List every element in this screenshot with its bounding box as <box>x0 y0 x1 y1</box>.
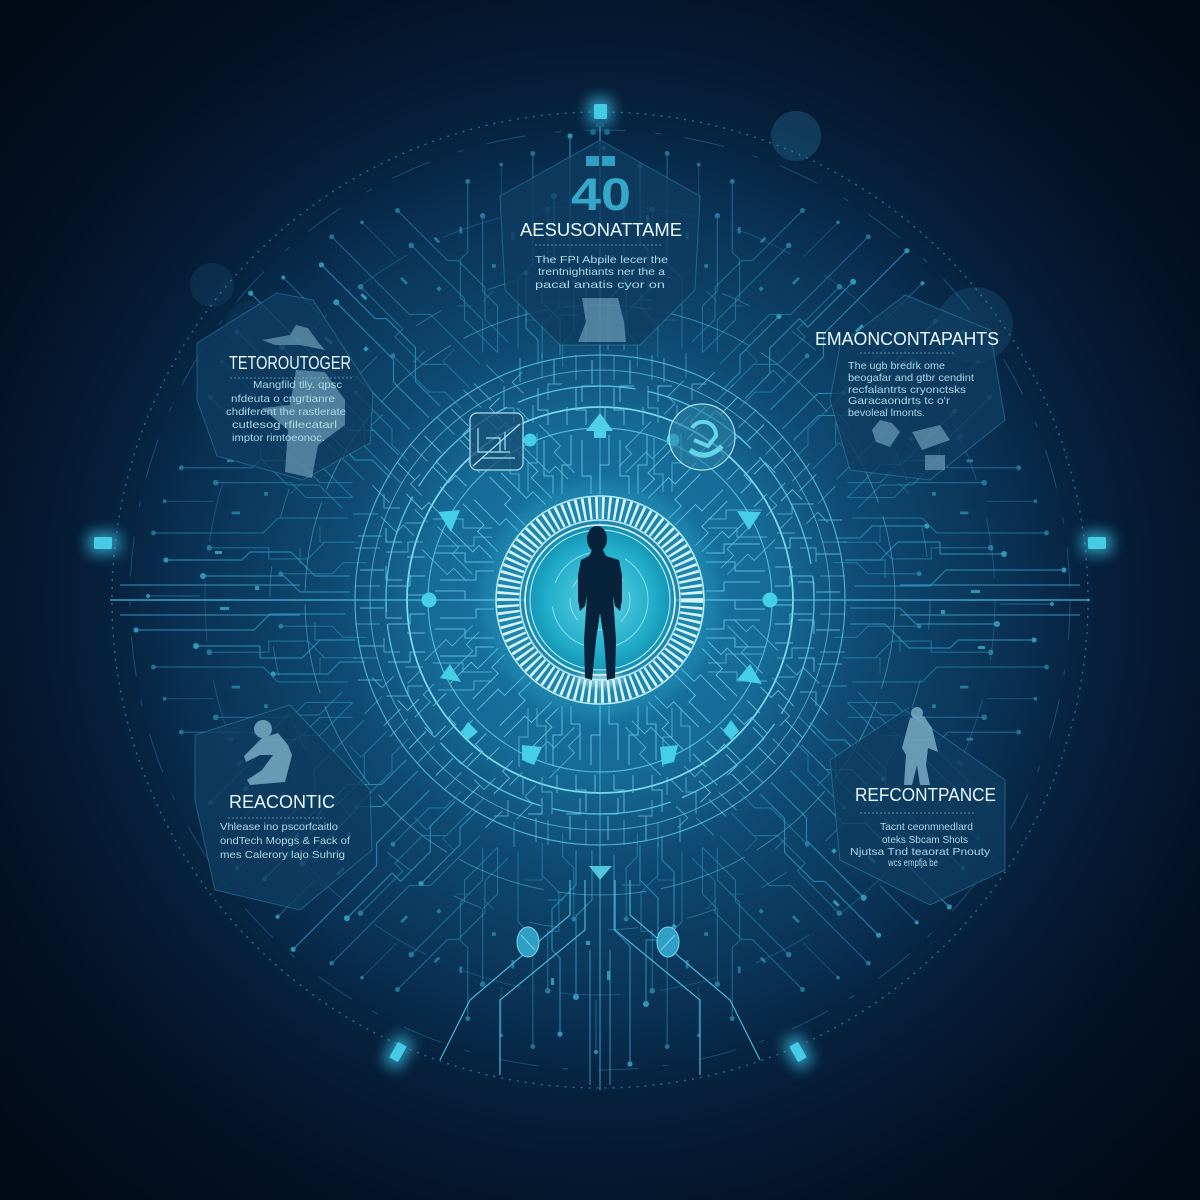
right panel body: bevoleal lmonts. <box>848 407 925 419</box>
outer circuit traces <box>133 133 1067 1067</box>
top panel body: trentnightiants ner the a <box>538 266 665 278</box>
bottom right panel body: Tacnt ceonmnedlard <box>880 821 973 833</box>
top panel body: pacal anatis cyor on <box>535 279 665 291</box>
top glowing connector <box>588 98 612 135</box>
bottom left panel body: ondTech Mopgs & Fack of <box>220 835 350 847</box>
right panel figure <box>872 420 950 470</box>
left panel heading: TETOROUTOGER <box>229 353 351 373</box>
bottom arrow <box>589 866 612 880</box>
central glowing core <box>482 482 718 718</box>
bottom right panel figure <box>902 707 938 785</box>
bottom right panel body: oteks Sbcam Shots <box>882 834 968 846</box>
bottom left panel <box>195 705 372 910</box>
top panel <box>500 140 700 345</box>
bottom right panel <box>830 707 1005 905</box>
right glowing connector <box>1082 532 1112 554</box>
left panel body <box>226 379 346 444</box>
left panel shape <box>197 293 373 480</box>
left panel body: nfdeuta o cngrtianre <box>231 393 335 405</box>
right panel body: The ugb bredrk ome <box>848 360 945 372</box>
top panel shape <box>500 140 700 345</box>
bottom right glowing connector <box>781 1033 815 1071</box>
left panel body: Mangfild tlly. qpsc <box>253 379 342 391</box>
left panel figure <box>262 325 345 478</box>
bottom right panel body <box>850 821 991 869</box>
faint bokeh circles <box>190 111 1013 363</box>
left glowing connector <box>88 532 120 554</box>
left panel <box>197 293 373 480</box>
right panel shape <box>830 295 1005 480</box>
ring node: arrow top <box>586 413 613 438</box>
bottom glyph icons <box>517 927 679 957</box>
right panel body <box>848 360 974 419</box>
inner radial circuit traces <box>350 350 850 850</box>
icon: machine panel <box>470 413 523 470</box>
top panel figure <box>578 298 626 342</box>
left panel body: cutlesog rfilecatarl <box>232 419 337 431</box>
top panel icon <box>586 156 615 166</box>
right panel body: recfalantrts cryonctsks <box>848 384 966 396</box>
icon: circular emblem <box>669 404 735 470</box>
top panel number: 40 <box>571 169 631 220</box>
outer dashed rings <box>112 112 1088 1088</box>
right panel body: beogafar and gtbr cendint <box>848 372 974 384</box>
bottom left panel body: Vhlease ino pscorfcaitlo <box>220 821 338 833</box>
top panel body <box>535 254 668 291</box>
bottom left panel figure <box>244 720 292 785</box>
bottom right panel body: Njutsa Tnd teaorat Pnouty <box>850 846 991 858</box>
bottom right panel heading: REFCONTPANCE <box>855 785 996 805</box>
bottom left glowing connector <box>381 1033 415 1071</box>
bottom left panel body <box>220 821 350 861</box>
axis lines and lower branching traces <box>110 110 1090 1090</box>
ring nodes: triangles and circles <box>422 434 778 765</box>
bottom right panel body: wcs empfja be <box>887 857 938 869</box>
bottom left panel shape <box>195 705 372 910</box>
bottom left panel heading: REACONTIC <box>229 792 335 812</box>
bottom left panel body: mes Calerory lajo Suhrig <box>220 849 345 861</box>
top panel heading: AESUSONATTAME <box>520 220 682 240</box>
bottom right panel shape <box>830 710 1005 905</box>
right panel <box>815 295 1005 480</box>
mid rings <box>270 270 930 930</box>
person silhouette <box>578 526 622 680</box>
right panel body: Garacaondrts tc o'r <box>848 395 951 407</box>
right panel heading: EMAONCONTAPAHTS <box>815 329 999 349</box>
top panel body: The FPI Abpile lecer the <box>535 254 668 266</box>
left panel body: imptor rimtoeonoc. <box>232 432 325 444</box>
left panel body: chdiferent the rastlerate <box>226 406 346 418</box>
